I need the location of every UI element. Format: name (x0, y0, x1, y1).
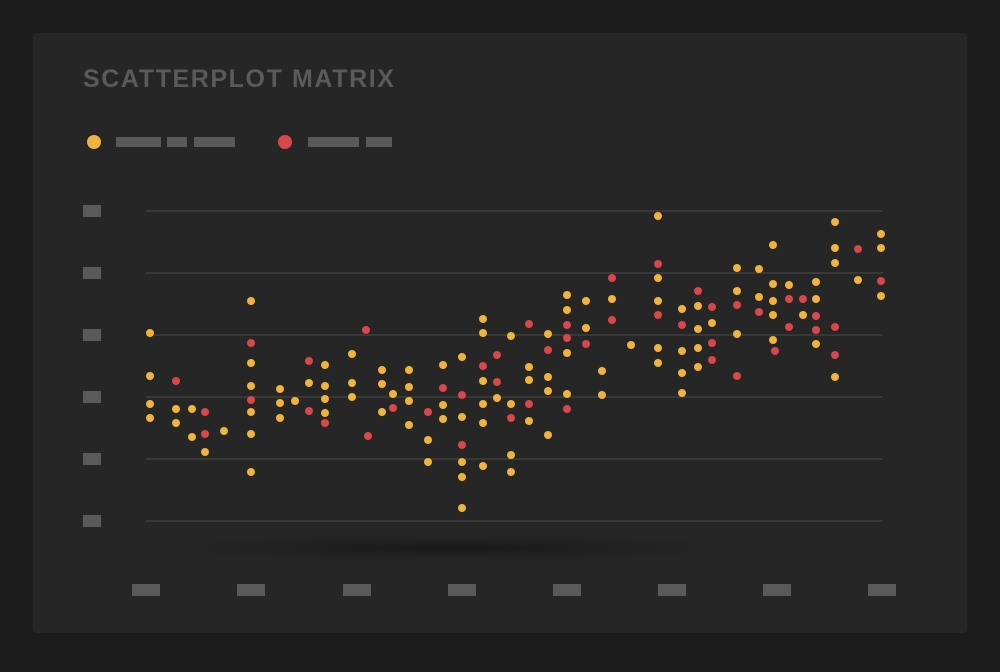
grid lines (146, 211, 883, 521)
legend (87, 135, 392, 149)
chart shadow (170, 534, 730, 562)
x axis labels (132, 584, 896, 596)
title: SCATTERPLOT MATRIX (83, 65, 396, 93)
scatter points: yellow series (146, 212, 885, 512)
y axis labels (83, 205, 101, 527)
scatter points: red series (172, 245, 885, 449)
